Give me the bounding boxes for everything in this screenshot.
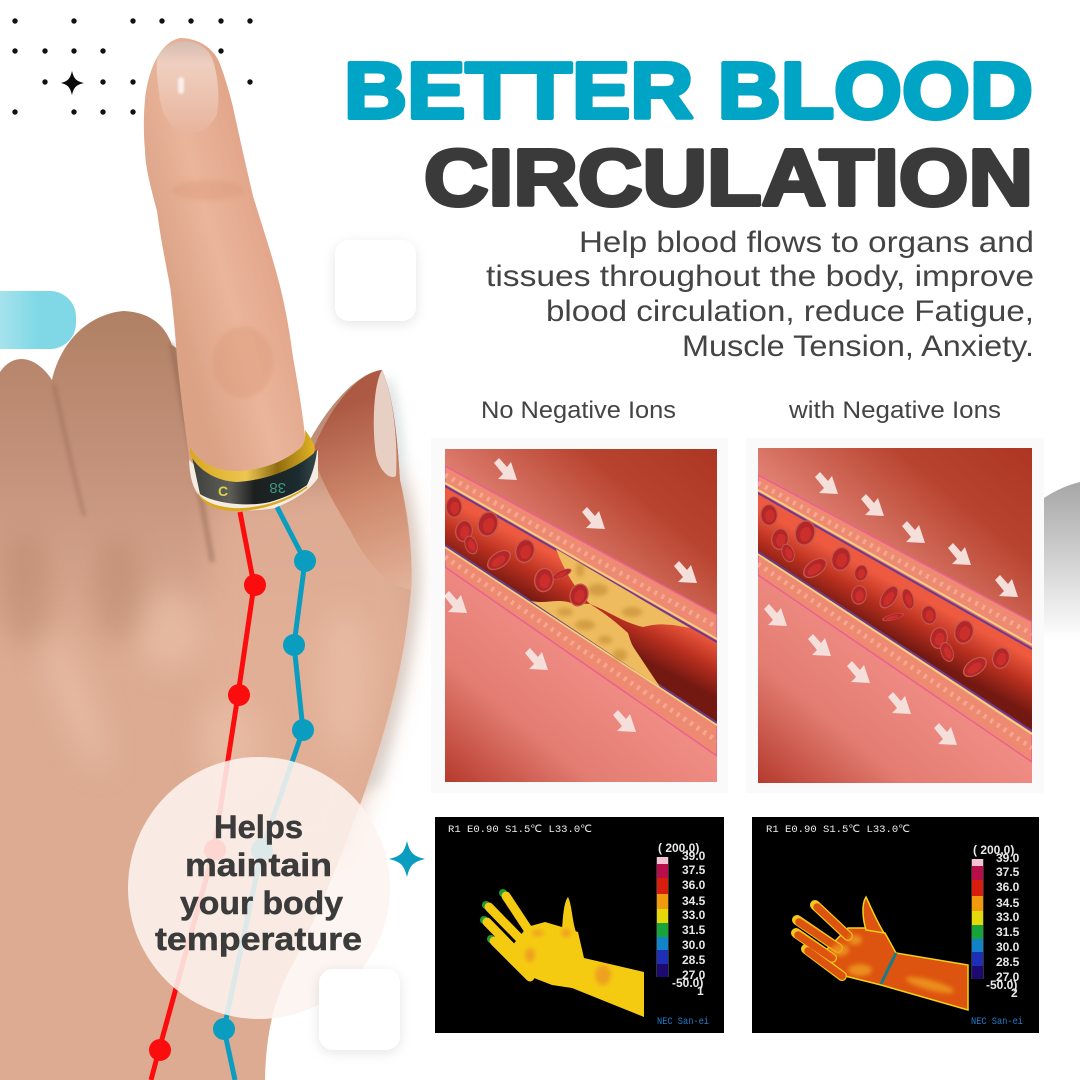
ring <box>189 430 318 511</box>
title: BETTER BLOOD <box>344 46 1033 135</box>
thermal brand: NEC San-ei <box>971 1016 1023 1028</box>
lower wall <box>445 546 717 756</box>
hand illustration <box>0 38 420 1080</box>
wall texture <box>758 483 1032 748</box>
index finger <box>144 38 310 479</box>
thermal hand <box>796 897 968 1010</box>
hand back <box>0 311 412 1080</box>
thermal scale labels: ( 200,0) <box>973 843 1014 857</box>
thermal scale labels: 34.5 <box>682 894 706 908</box>
thermal header: R1 E0.90 S1.5℃ L33.0℃ <box>766 825 910 836</box>
nail highlight <box>178 77 184 94</box>
ring symbol: C <box>218 483 228 499</box>
ring halo <box>189 450 318 510</box>
thermal brand: NEC San-ei <box>657 1016 709 1028</box>
hand dark valleys <box>0 530 142 650</box>
finger gap shadows <box>54 345 212 560</box>
thermal scale labels: 27.0 <box>996 970 1020 984</box>
right finger <box>312 370 411 590</box>
lumen <box>758 492 1032 732</box>
right side skin tone <box>200 480 412 860</box>
wall texture <box>445 475 717 741</box>
fingernail <box>157 41 218 134</box>
thermal scale labels: 37.5 <box>996 865 1020 879</box>
red line <box>149 512 266 1080</box>
lumen <box>445 485 717 723</box>
callout text: your body <box>180 885 343 921</box>
description text: Muscle Tension, Anxiety. <box>682 330 1034 363</box>
thermal scale labels: 33.0 <box>996 910 1020 924</box>
ring temperature: 38 <box>269 479 286 496</box>
thermal scale bar <box>971 859 984 979</box>
upper wall <box>758 475 1032 646</box>
icon: teal sparkle <box>389 841 425 877</box>
thermal warm patches <box>525 929 611 985</box>
blood cells <box>760 504 1012 681</box>
teal bar <box>0 291 76 349</box>
arrows <box>444 458 697 732</box>
white rounded card top <box>335 240 416 321</box>
description text: tissues throughout the body, improve <box>486 260 1034 293</box>
plaque mottling <box>557 563 642 661</box>
right fingernail <box>374 370 396 477</box>
thermal scale labels: 31.5 <box>996 925 1020 939</box>
thermal scale labels: 39.0 <box>682 849 706 863</box>
description text <box>486 226 1034 363</box>
hand shadow <box>345 375 420 803</box>
description text: Help blood flows to organs and <box>579 226 1034 259</box>
thermal scale labels <box>973 843 1020 1000</box>
upper wall <box>445 466 717 640</box>
thermal scale labels: 34.5 <box>996 896 1020 910</box>
white card bottom <box>319 969 400 1050</box>
callout text: maintain <box>185 847 332 883</box>
thermal scale labels: 2 <box>1011 986 1018 1000</box>
label: no negative ions: No Negative Ions <box>481 397 676 424</box>
thermal scale labels: 30.0 <box>996 940 1020 954</box>
thermal scale labels: 28.5 <box>996 955 1020 969</box>
thermal scale labels: 28.5 <box>682 953 706 967</box>
callout circle <box>128 757 390 1019</box>
hand highlights <box>30 590 370 780</box>
thermal scale labels: ( 200,0) <box>658 841 699 855</box>
panel: thermal image before <box>435 817 724 1033</box>
thermal scale bar <box>656 857 669 977</box>
thermal hand <box>480 889 644 1017</box>
panel: clear artery <box>758 448 1032 783</box>
ring bottom rim <box>197 486 307 511</box>
dot grid <box>12 18 253 115</box>
title: CIRCULATION <box>424 133 1033 222</box>
thermal scale labels: 31.5 <box>682 923 706 937</box>
blood cells <box>446 496 592 609</box>
icon: black sparkle <box>61 71 84 95</box>
callout text: Helps <box>214 809 303 845</box>
callout text: temperature <box>155 921 362 957</box>
thermal header: R1 E0.90 S1.5℃ L33.0℃ <box>448 825 592 836</box>
thermal scale labels: 36.0 <box>682 878 706 892</box>
callout text <box>155 809 362 957</box>
panel: blocked artery <box>445 449 717 782</box>
description text: blood circulation, reduce Fatigue, <box>546 295 1034 328</box>
thermal scale labels: 36.0 <box>996 880 1020 894</box>
thermal wrist band <box>881 953 896 984</box>
ring top rim <box>190 430 315 482</box>
blue line <box>213 507 316 1080</box>
grey decorative circle <box>1044 482 1080 640</box>
knuckle wrinkles <box>172 180 273 398</box>
thermal scale labels: 27.0 <box>682 968 706 982</box>
thermal scale labels: 39.0 <box>996 851 1020 865</box>
thermal scale labels <box>658 841 706 998</box>
ring band <box>192 450 317 504</box>
thermal scale labels: 30.0 <box>682 938 706 952</box>
thermal scale labels: 1 <box>697 984 704 998</box>
thermal scale labels: -50.0) <box>672 976 703 990</box>
title <box>344 46 1033 222</box>
label: with negative ions: with Negative Ions <box>788 397 1001 424</box>
thermal light patches <box>831 935 955 996</box>
plaque lower <box>531 601 660 687</box>
lower wall <box>758 553 1032 762</box>
thermal scale labels: -50.0) <box>986 978 1017 992</box>
temperature lines <box>149 507 316 1080</box>
thermal scale labels: 33.0 <box>682 908 706 922</box>
arrows <box>764 472 1018 745</box>
thermal scale labels: 37.5 <box>682 863 706 877</box>
plaque upper <box>556 549 690 628</box>
panel: thermal image after <box>752 817 1039 1033</box>
